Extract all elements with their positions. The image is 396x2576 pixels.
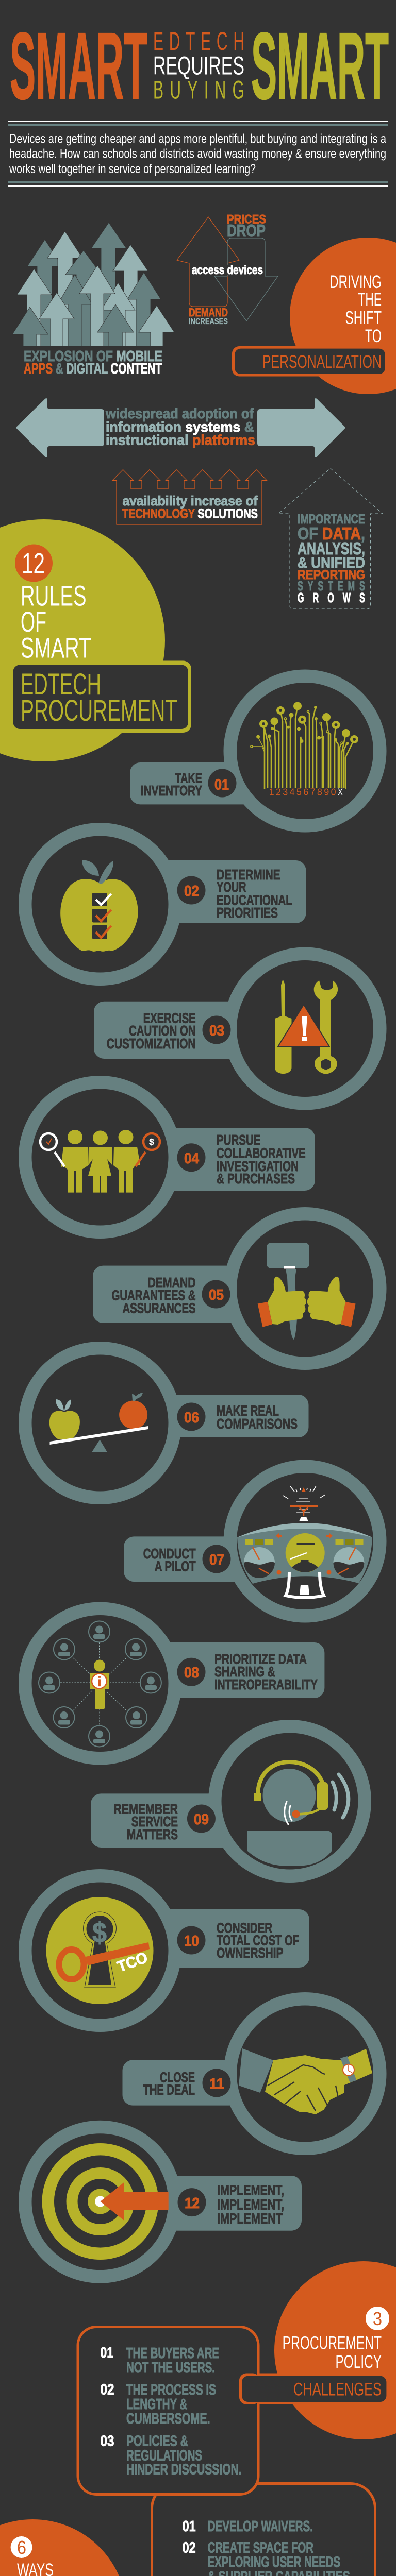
- double arrow: widespread adoption: instructional platforms: [106, 432, 255, 448]
- icon: importance of data dashed arrow: & UNIFIED: [298, 555, 365, 571]
- label: explosion of mobile apps and digital content: EXPLOSION OF MOBILE: [24, 348, 162, 365]
- rule 01: take inventory: X: [338, 787, 343, 798]
- panel: 6 ways list box: 01: [183, 2518, 196, 2535]
- rule 11: close the deal: CLOSE: [160, 2069, 195, 2085]
- title: EDTECH: [153, 27, 244, 56]
- rule 09: remember service matters: SERVICE: [131, 1814, 178, 1829]
- panel: driving the shift to personalization: TO: [365, 326, 382, 346]
- double arrow: widespread adoption: [16, 399, 345, 457]
- rule 09: remember service matters: [91, 1720, 371, 1883]
- icon: prices drop, demand increases arrows: access devices: [192, 263, 263, 277]
- panel: 12 rules of smart edtech procurement: [0, 519, 191, 761]
- panel: 3 procurement policy challenges: [78, 2261, 396, 2495]
- rule 03: exercise caution on customization: [94, 947, 387, 1110]
- intro text block: works well together in service of personalized learning?: [9, 162, 256, 176]
- icon: data sharing network: [39, 1621, 161, 1747]
- panel: 3 procurement policy challenges: POLICIES &: [126, 2433, 188, 2450]
- rule 09: remember service matters: REMEMBER: [113, 1801, 178, 1817]
- rule 03: exercise caution on customization: EXERCISE: [143, 1010, 196, 1026]
- icon: importance of data dashed arrow: ANALYSIS,: [298, 539, 365, 558]
- icon: prices drop, demand increases arrows: [177, 212, 278, 326]
- rule 07: conduct a pilot: CONDUCT: [143, 1546, 196, 1562]
- rule 04: pursue collaborative investigation and purchases: COLLABORATIVE: [217, 1145, 306, 1161]
- icon: keyhole and TCO key: $: [92, 1917, 107, 1948]
- rule 06: make real comparisons: [19, 1342, 308, 1504]
- panel: 3 procurement policy challenges: REGULATIONS: [126, 2447, 202, 2464]
- icon: tools and warning sign: [275, 979, 338, 1074]
- rule 11: close the deal: THE DEAL: [143, 2082, 195, 2098]
- icon: prices drop, demand increases arrows: INCREASES: [189, 317, 228, 326]
- rule 02: determine your educational priorities: 02: [184, 883, 199, 900]
- icon: apple and orange on a scale: [50, 1393, 148, 1452]
- rule 04: pursue collaborative investigation and purchases: PURSUE: [217, 1132, 261, 1148]
- rule 04: pursue collaborative investigation and purchases: INVESTIGATION: [217, 1158, 299, 1174]
- panel: 3 procurement policy challenges: 02: [100, 2382, 114, 2398]
- rule 10: consider total cost of ownership: OWNERSHIP: [217, 1945, 284, 1961]
- rule 12: implement, implement, implement: IMPLEMENT,: [217, 2197, 284, 2213]
- panel: 12 rules of smart edtech procurement: RULES: [21, 580, 87, 612]
- rule 02: determine your educational priorities: EDUCATIONAL: [217, 892, 292, 908]
- icon: prices drop, demand increases arrows: DROP: [227, 221, 266, 240]
- rule 01: take inventory: INVENTORY: [141, 783, 202, 799]
- rule 06: make real comparisons: 06: [184, 1410, 199, 1426]
- panel: 6 ways to modernize procurement policy: [0, 2519, 165, 2576]
- icon: availability increase arrows: availability increase of: [123, 493, 258, 509]
- icon: explosion of arrows: [12, 223, 174, 346]
- panel: 6 ways list box: 02: [183, 2540, 196, 2556]
- panel: 6 ways list box: EXPLORING USER NEEDS: [208, 2554, 340, 2571]
- panel: 6 ways to modernize procurement policy: 6: [17, 2537, 26, 2558]
- rule 03: exercise caution on customization: 03: [209, 1023, 224, 1039]
- rule 10: consider total cost of ownership: [19, 1869, 309, 2032]
- rule 08: prioritize data sharing and interoperability: [19, 1602, 324, 1765]
- icon: availability increase arrows: TECHNOLOGY SOLUTIONS: [122, 506, 258, 521]
- panel: 12 rules of smart edtech procurement: PROCUREMENT: [21, 694, 177, 727]
- panel: 3 procurement policy challenges: THE PROCESS IS: [126, 2382, 216, 2398]
- icon: importance of data dashed arrow: REPORTING: [298, 568, 365, 582]
- rule 07: conduct a pilot: 07: [209, 1552, 224, 1568]
- icon: prices drop, demand increases arrows: PRICES: [227, 212, 266, 227]
- icon: gavel and thumbs up: [258, 1243, 356, 1340]
- icon: keyhole and TCO key: [46, 1897, 154, 2004]
- rule 08: prioritize data sharing and interoperability: SHARING &: [214, 1664, 275, 1680]
- rule 08: prioritize data sharing and interoperability: PRIORITIZE DATA: [214, 1651, 307, 1667]
- panel: 3 procurement policy challenges: 3: [373, 2308, 382, 2329]
- panel: 12 rules of smart edtech procurement: 12: [22, 547, 45, 580]
- rule 10: consider total cost of ownership: CONSIDER: [217, 1920, 272, 1936]
- rule 08: prioritize data sharing and interoperability: INTEROPERABILITY: [214, 1676, 318, 1692]
- rule 03: exercise caution on customization: CAUTION ON: [129, 1023, 196, 1039]
- icon: importance of data dashed arrow: IMPORTANCE: [298, 512, 365, 527]
- icon: handshake: [239, 2048, 372, 2114]
- rule 05: demand guarantees and assurances: GUARANTEES &: [111, 1287, 196, 1303]
- double arrow: widespread adoption: widespread adoption of: [105, 405, 254, 421]
- icon: barcode tree: [250, 702, 358, 789]
- rule 02: determine your educational priorities: PRIORITIES: [217, 905, 278, 921]
- icon: apple checklist: [60, 860, 138, 952]
- panel: 6 ways list box: [152, 2483, 375, 2576]
- panel: 3 procurement policy challenges: CUMBERSOME.: [126, 2411, 210, 2427]
- intro text block: [8, 121, 388, 187]
- panel: 6 ways list box: DEVELOP WAIVERS.: [208, 2518, 313, 2535]
- rule 11: close the deal: 11: [209, 2076, 224, 2092]
- rule 06: make real comparisons: COMPARISONS: [217, 1416, 298, 1432]
- rule 02: determine your educational priorities: [19, 823, 306, 986]
- icon: prices drop, demand increases arrows: DEMAND: [189, 306, 228, 319]
- rule 01: take inventory: 1 2 3 4 5 6 7 8 9 0: [269, 787, 336, 798]
- icon: cockpit dashboard: [237, 1486, 372, 1598]
- rule 05: demand guarantees and assurances: [93, 1207, 387, 1370]
- icon: keyhole and TCO key: TCO: [115, 1949, 150, 1976]
- rule 01: take inventory: TAKE: [175, 770, 202, 786]
- rule 02: determine your educational priorities: DETERMINE: [217, 867, 280, 883]
- icon: importance of data dashed arrow: SYSTEMS: [298, 578, 365, 594]
- rule 05: demand guarantees and assurances: DEMAND: [147, 1275, 196, 1291]
- panel: 3 procurement policy challenges: NOT THE USERS.: [126, 2360, 215, 2376]
- rule 12: implement, implement, implement: IMPLEMENT,: [217, 2182, 284, 2198]
- icon: availability increase arrows: [112, 470, 267, 524]
- title: REQUIRES: [153, 52, 244, 80]
- rule 11: close the deal: [123, 1992, 387, 2155]
- icon: three people with magnifiers: [40, 1130, 160, 1193]
- rule 07: conduct a pilot: A PILOT: [155, 1558, 196, 1574]
- rule 04: pursue collaborative investigation and purchases: [19, 1076, 315, 1239]
- rule 04: pursue collaborative investigation and purchases: & PURCHASES: [217, 1171, 295, 1187]
- icon: data sharing network: i: [97, 1674, 102, 1689]
- icon: importance of data dashed arrow: [278, 468, 383, 609]
- rule 12: implement, implement, implement: [19, 2121, 302, 2283]
- panel: 3 procurement policy challenges: 03: [100, 2433, 114, 2450]
- rule 12: implement, implement, implement: IMPLEMENT: [217, 2211, 283, 2227]
- icon: support headset: [247, 1762, 349, 1866]
- rule 06: make real comparisons: MAKE REAL: [217, 1402, 279, 1418]
- rule 01: take inventory: [130, 670, 387, 833]
- rule 07: conduct a pilot: [124, 1460, 387, 1623]
- panel: 12 rules of smart edtech procurement: EDTECH: [21, 668, 101, 701]
- panel: 3 procurement policy challenges: 01: [100, 2345, 113, 2361]
- label: explosion of mobile apps and digital content: [24, 348, 162, 377]
- title: BUYING: [153, 76, 244, 104]
- rule 05: demand guarantees and assurances: ASSURANCES: [123, 1300, 196, 1316]
- panel: driving the shift to personalization: THE: [358, 290, 382, 310]
- rule 10: consider total cost of ownership: 10: [184, 1933, 199, 1950]
- panel: driving the shift to personalization: [232, 238, 396, 394]
- rule 08: prioritize data sharing and interoperability: 08: [184, 1665, 199, 1681]
- rule 09: remember service matters: MATTERS: [127, 1826, 178, 1842]
- rule 10: consider total cost of ownership: TOTAL COST OF: [217, 1933, 299, 1948]
- rule 01: take inventory: 01: [214, 777, 229, 793]
- double arrow: widespread adoption: information systems &: [106, 419, 254, 435]
- rule 09: remember service matters: 09: [194, 1811, 209, 1828]
- panel: 3 procurement policy challenges: THE BUYERS ARE: [126, 2345, 219, 2362]
- icon: three people with magnifiers: $: [149, 1137, 155, 1147]
- panel: 6 ways list box: CREATE SPACE FOR: [208, 2540, 314, 2556]
- title: SMART: [10, 12, 147, 118]
- rule 05: demand guarantees and assurances: 05: [209, 1287, 224, 1303]
- panel: 12 rules of smart edtech procurement: OF: [21, 605, 46, 638]
- panel: driving the shift to personalization: SHIFT: [345, 308, 382, 328]
- rule 04: pursue collaborative investigation and purchases: 04: [184, 1150, 199, 1167]
- icon: importance of data dashed arrow: GROWS: [298, 590, 365, 605]
- label: explosion of mobile apps and digital content: APPS & DIGITAL CONTENT: [24, 361, 162, 377]
- icon: importance of data dashed arrow: OF DATA,: [298, 524, 365, 543]
- rule 03: exercise caution on customization: CUSTOMIZATION: [107, 1036, 196, 1052]
- panel: 3 procurement policy challenges: LENGTHY &: [126, 2396, 187, 2413]
- panel: 3 procurement policy challenges: HINDER DISCUSSION.: [126, 2462, 242, 2478]
- icon: target with arrow: [42, 2143, 169, 2260]
- rule 02: determine your educational priorities: YOUR: [217, 879, 246, 895]
- panel: 12 rules of smart edtech procurement: SMART: [21, 632, 91, 664]
- rule 12: implement, implement, implement: 12: [185, 2195, 200, 2212]
